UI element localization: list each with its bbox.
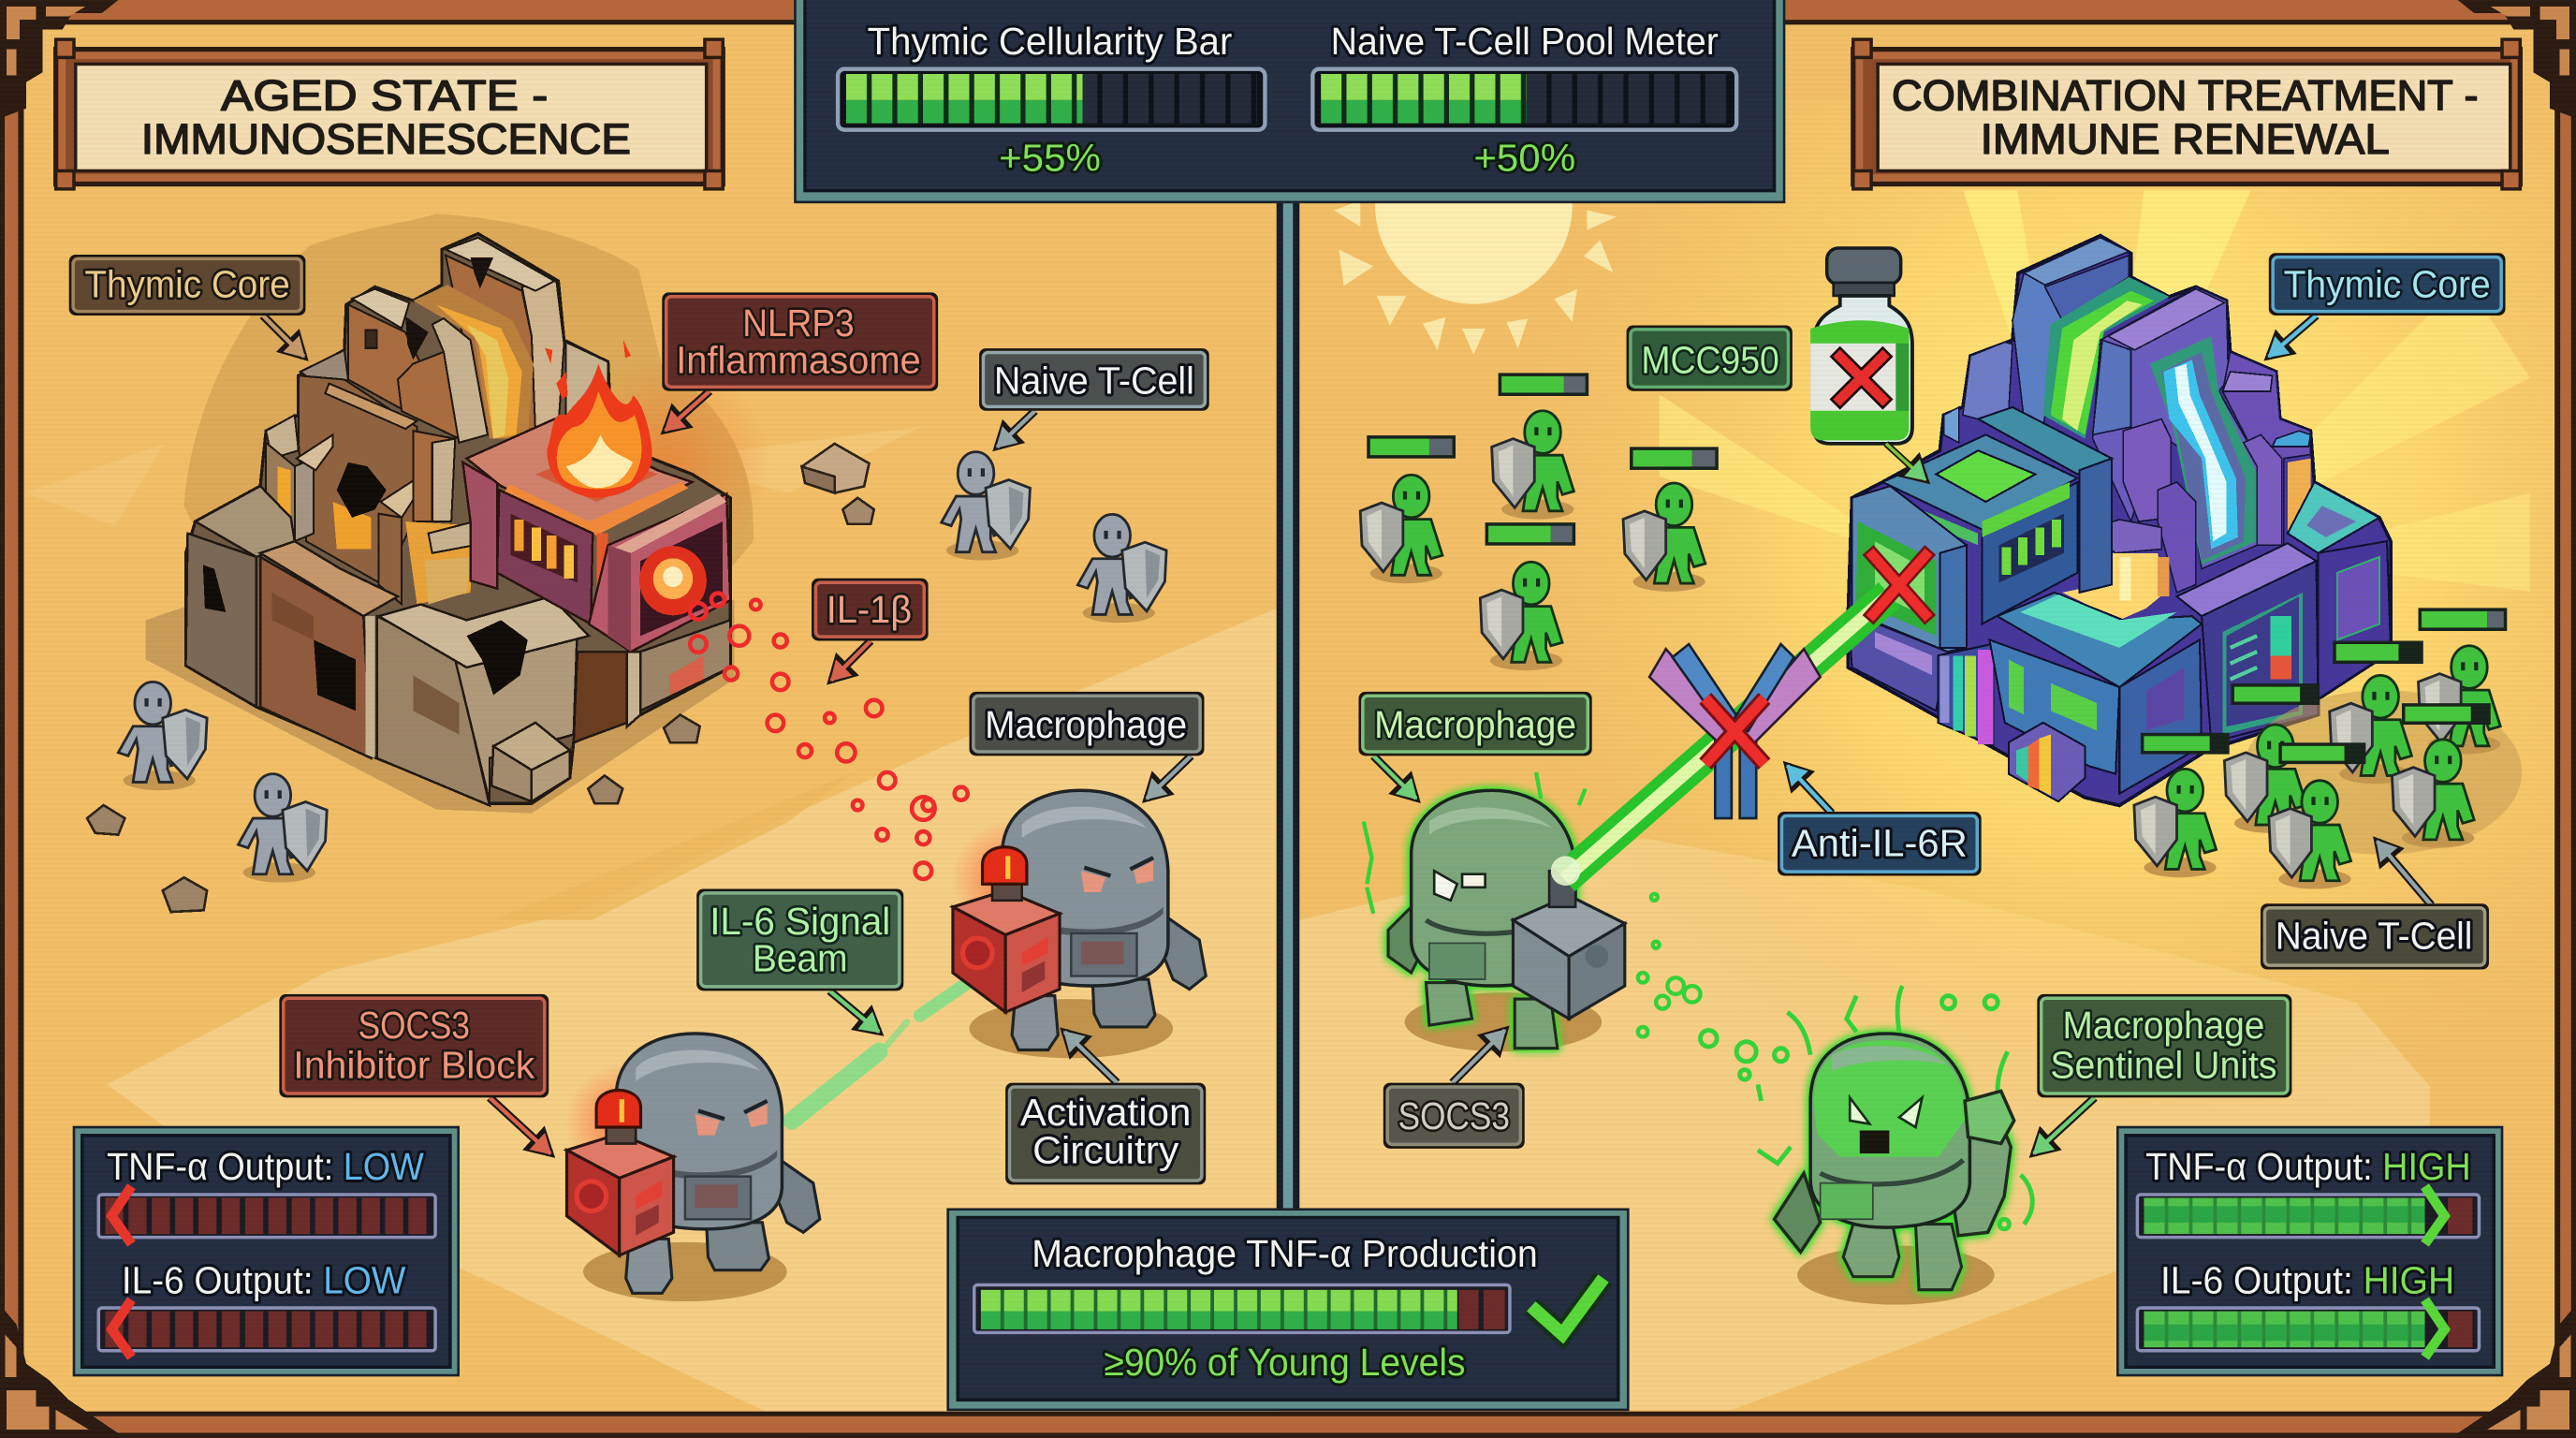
activated macrophage	[1364, 772, 1701, 1051]
label: macrophage right	[1358, 692, 1592, 799]
label: socs3	[1383, 1030, 1525, 1149]
thymic cellularity meter	[838, 69, 1265, 130]
il-6 signal beam	[792, 976, 977, 1121]
purple tower	[2093, 286, 2257, 569]
coloured columns	[1938, 644, 1994, 746]
right block	[2288, 482, 2391, 699]
naive pool meter	[1312, 69, 1736, 130]
label: thymic core left: Thymic Core	[84, 263, 290, 306]
label: nlrp3 inflammasome	[662, 292, 938, 431]
il-1b particles	[690, 594, 968, 879]
purple block	[2176, 543, 2319, 742]
thymic cellularity bar label: Thymic Cellularity Bar	[868, 20, 1232, 63]
label: naive t-cell right: Naive T-Cell	[2276, 915, 2472, 958]
label: socs3 inhibitor block	[279, 994, 550, 1153]
label: il-6 signal beam: IL-6 Signal	[710, 900, 890, 943]
label: il-6 signal beam: Beam	[753, 936, 848, 979]
orange glow near furnace	[558, 360, 772, 565]
label: macrophage left	[970, 692, 1204, 799]
tnf-a high meter	[2137, 1186, 2479, 1244]
lower left block	[185, 486, 398, 758]
robot details	[1426, 808, 1625, 1019]
tnf-a low meter	[98, 1186, 435, 1244]
label: anti-il-6r: Anti-IL-6R	[1792, 821, 1968, 864]
label: thymic core right: Thymic Core	[2284, 263, 2491, 306]
building silhouette	[185, 234, 730, 803]
smoke halo	[183, 214, 754, 600]
panel: macrophage tnf-a production	[948, 1210, 1628, 1410]
renewed thymic core	[1848, 236, 2391, 805]
rear slab	[446, 238, 608, 431]
right title plaque: COMBINATION TREATMENT -	[1892, 72, 2479, 120]
glowing arch	[413, 285, 534, 439]
top center stats panel	[795, 0, 1784, 202]
anti-il-6r beam	[1551, 582, 1900, 891]
thymic cellularity value: +55%	[999, 137, 1101, 180]
label: socs3: SOCS3	[1398, 1094, 1510, 1137]
flame	[545, 340, 652, 498]
right mass	[2100, 352, 2310, 593]
inflammasome machine	[462, 419, 730, 652]
label: naive t-cell right	[2261, 842, 2489, 970]
yellow inner glow	[2062, 459, 2310, 620]
label: thymic core left	[69, 255, 305, 357]
label: macrophage sentinel units: Sentinel Units	[2050, 1043, 2277, 1086]
il-6 low label: IL-6 Output: LOW	[122, 1258, 406, 1301]
sun	[1334, 107, 1617, 355]
left dunes	[24, 427, 1278, 1438]
green arch	[2043, 277, 2169, 439]
red x on machine	[1873, 555, 1925, 614]
il-6 high meter	[2137, 1299, 2479, 1357]
label: il-1 beta: IL-1β	[827, 588, 912, 631]
aged macrophage 2	[565, 1034, 820, 1301]
front lower block	[1989, 593, 2202, 794]
tnf-a low label: TNF-α Output: LOW	[107, 1145, 424, 1188]
label: activation circuitry	[1005, 1032, 1206, 1184]
label: activation circuitry: Circuitry	[1032, 1129, 1179, 1172]
label: il-6 signal beam	[696, 889, 903, 1032]
healthy naive t-cells	[1360, 373, 1719, 670]
label: macrophage sentinel units	[2034, 994, 2291, 1153]
mcc950 vial	[1810, 248, 1912, 444]
center divider	[1277, 194, 1299, 1221]
building silhouette	[1848, 236, 2391, 805]
t-cell crowd	[2134, 608, 2522, 889]
scene: ruined thymus	[146, 214, 772, 814]
right title plaque	[1853, 39, 2520, 189]
label: socs3 inhibitor block: Inhibitor Block	[293, 1043, 535, 1086]
production value: ≥90% of Young Levels	[1104, 1341, 1466, 1384]
panel: left output low	[74, 1127, 459, 1375]
label: nlrp3 inflammasome: NLRP3	[742, 301, 855, 345]
front block	[377, 596, 730, 805]
aged macrophage 1	[951, 790, 1206, 1058]
rainbow cartridge	[2009, 723, 2086, 801]
label: naive t-cell left	[979, 348, 1209, 447]
panel: right output high	[2117, 1127, 2502, 1375]
label: macrophage right: Macrophage	[1374, 703, 1576, 746]
label: mcc950: MCC950	[1641, 338, 1779, 381]
left title plaque: IMMUNOSENESCENCE	[141, 115, 631, 163]
sentinel sparks	[1701, 986, 2032, 1229]
label: naive t-cell left: Naive T-Cell	[994, 359, 1194, 402]
production label: Macrophage TNF-α Production	[1032, 1232, 1538, 1275]
front-left slab	[348, 289, 488, 443]
label: nlrp3 inflammasome: Inflammasome	[676, 338, 921, 381]
robot body	[1388, 790, 1575, 1049]
waterfall	[2150, 336, 2257, 565]
right background glow and dunes	[1290, 98, 2554, 1410]
il-6 high label: IL-6 Output: HIGH	[2160, 1258, 2454, 1301]
furnace explosion	[639, 546, 707, 615]
label: socs3 inhibitor block: SOCS3	[359, 1004, 470, 1047]
right title plaque: IMMUNE RENEWAL	[1981, 115, 2390, 163]
ground shadow	[146, 521, 734, 814]
label: macrophage sentinel units: Macrophage	[2063, 1004, 2264, 1047]
mid body	[266, 350, 475, 605]
label: macrophage left: Macrophage	[985, 703, 1187, 746]
production check mark	[1531, 1278, 1603, 1334]
naive pool value: +50%	[1473, 137, 1575, 180]
label: activation circuitry: Activation	[1020, 1091, 1191, 1134]
sentinel body	[1775, 1034, 2011, 1290]
green sparks	[1364, 772, 1701, 1036]
label: mcc950	[1627, 326, 1925, 479]
label: il-1 beta	[812, 579, 929, 681]
anti-il-6r antibody	[1649, 644, 1821, 818]
il-6 low meter	[98, 1299, 435, 1357]
sentinel details	[1814, 1040, 2014, 1219]
production meter	[974, 1284, 1510, 1332]
label: anti-il-6r	[1778, 766, 1982, 875]
naive pool label: Naive T-Cell Pool Meter	[1331, 20, 1719, 63]
label: thymic core right	[2269, 253, 2506, 357]
left title plaque	[56, 39, 723, 189]
tnf-a high label: TNF-α Output: HIGH	[2145, 1145, 2471, 1188]
left title plaque: AGED STATE -	[221, 72, 548, 120]
rear pillar	[1943, 238, 2129, 443]
treatment machine	[1848, 407, 2112, 711]
grey naive t-cells	[118, 452, 1166, 882]
rocks	[87, 444, 874, 912]
sentinel macrophage	[1701, 986, 2032, 1305]
